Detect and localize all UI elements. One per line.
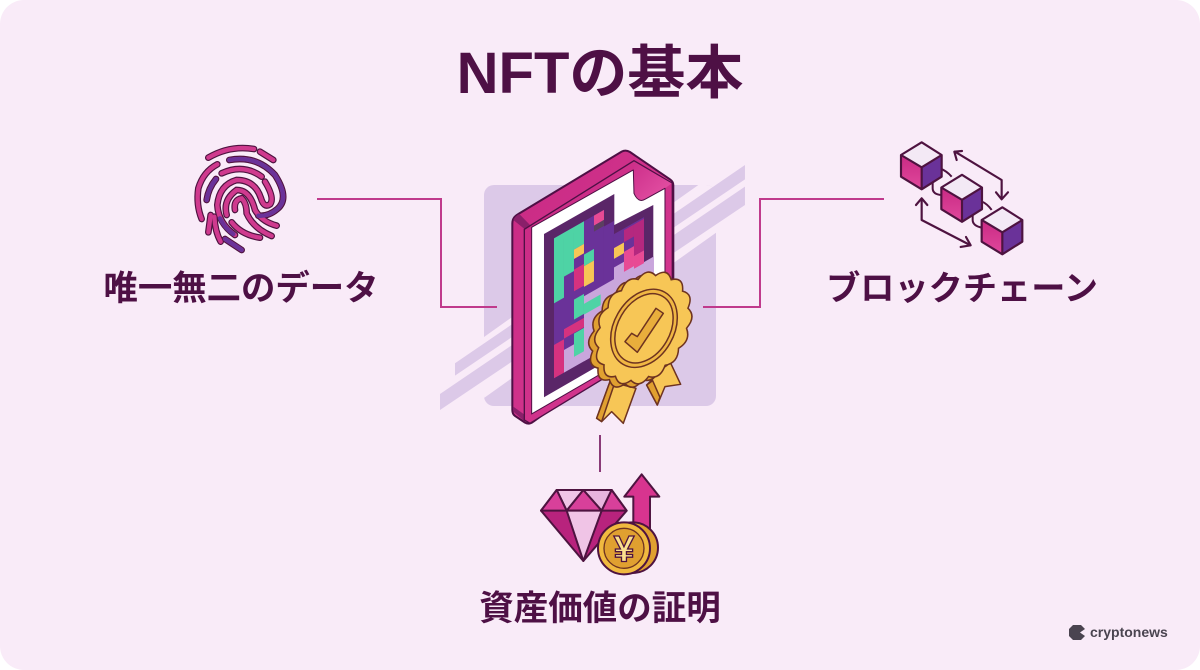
pixel art xyxy=(554,181,654,378)
badge depth xyxy=(570,258,705,404)
icon: fingerprint xyxy=(198,148,283,250)
gold badge xyxy=(570,255,711,423)
yellow blocks xyxy=(574,244,584,259)
yen coin: ¥ xyxy=(614,528,635,570)
up arrow xyxy=(624,474,659,528)
connector: right xyxy=(703,199,884,307)
ribbons xyxy=(597,362,681,423)
arrow: upper double arrow xyxy=(954,151,1008,199)
badge rings xyxy=(597,277,691,379)
logo mark xyxy=(1069,625,1085,640)
logo: cryptonews: cryptonews xyxy=(1090,624,1168,640)
lilac backdrop square with stripes xyxy=(440,165,745,410)
check mark xyxy=(625,308,663,352)
title: NFTの基本 xyxy=(457,41,743,106)
label: proof of asset value: 資産価値の証明 xyxy=(479,590,721,628)
connector: bottom xyxy=(599,435,601,472)
diamond xyxy=(541,490,627,561)
arrow: lower double arrow xyxy=(916,198,971,247)
NFT document xyxy=(512,151,673,424)
label: blockchain: ブロックチェーン xyxy=(826,269,1098,308)
green blocks xyxy=(554,233,564,303)
label: unique data: 唯一無二のデータ xyxy=(103,269,379,308)
icon: diamond with yen coin and arrow xyxy=(541,474,659,574)
icon: blockchain cubes xyxy=(901,142,1022,254)
chain links xyxy=(933,168,992,228)
connector: left xyxy=(317,199,497,307)
central illustration: NFT document and badge xyxy=(440,150,745,425)
badge face xyxy=(576,255,711,401)
pink blocks xyxy=(594,210,604,226)
fingerprint purple ridges xyxy=(207,159,283,250)
